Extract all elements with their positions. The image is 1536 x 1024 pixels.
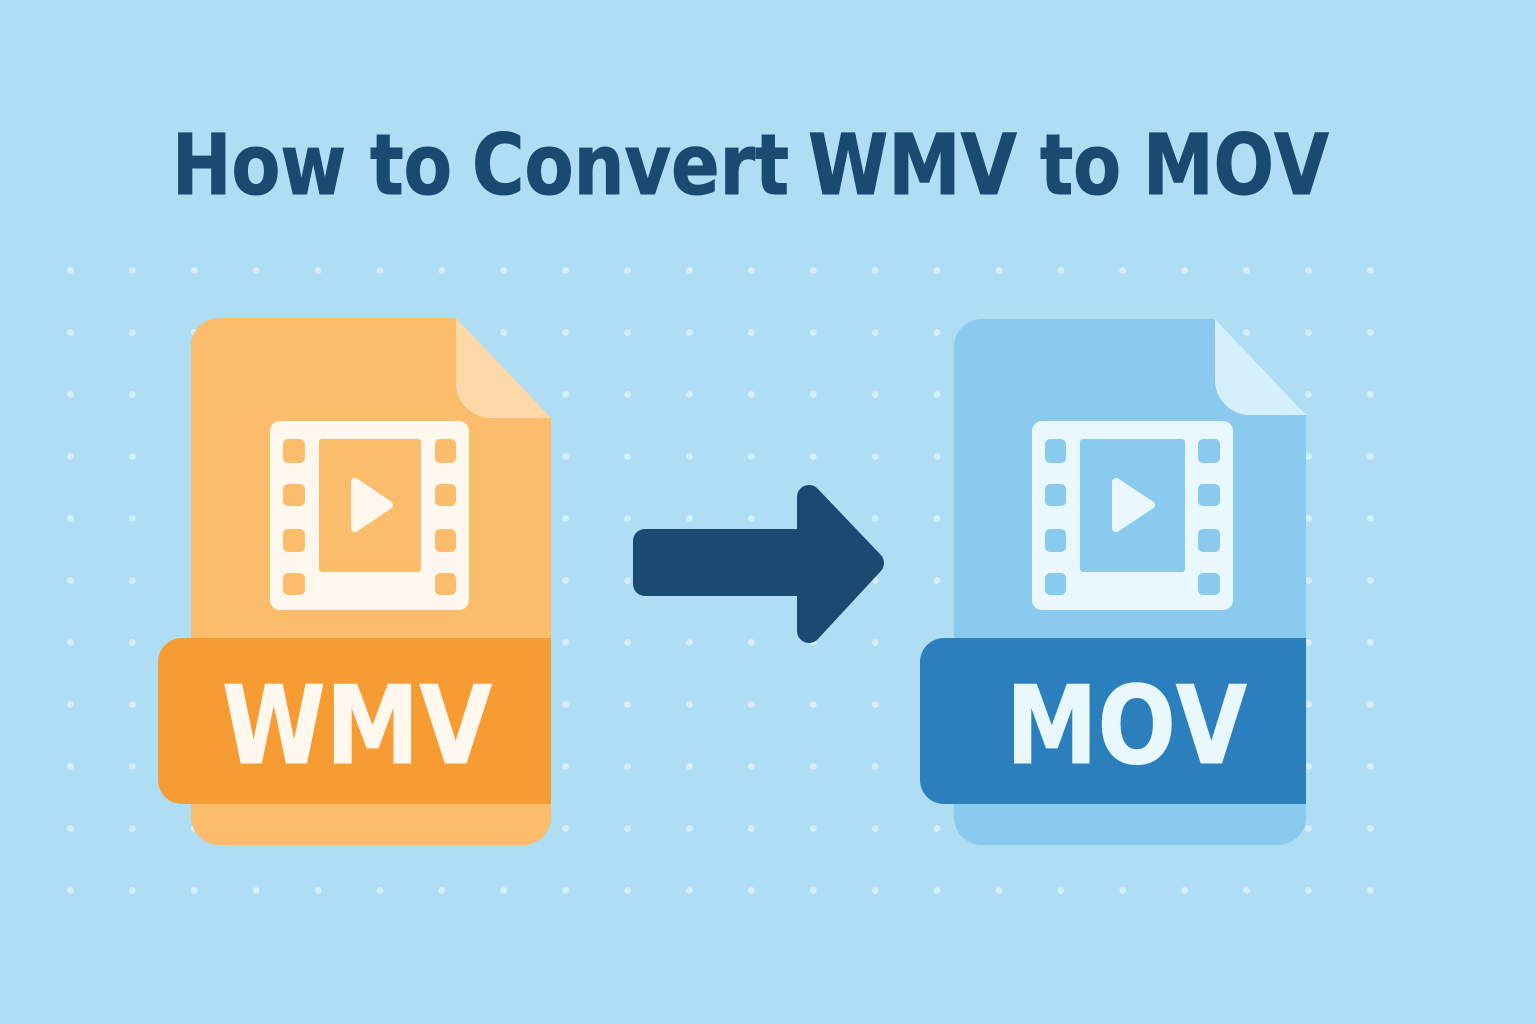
label band: WMV bbox=[158, 638, 551, 804]
title: Convert bbox=[472, 116, 789, 214]
label band: WMV: WMV bbox=[222, 664, 492, 789]
icon: MOV file bbox=[920, 319, 1306, 845]
icon: WMV file bbox=[158, 318, 551, 845]
title: MOV bbox=[1143, 116, 1329, 214]
arrow bbox=[633, 497, 872, 631]
title bbox=[172, 116, 1329, 214]
title: How bbox=[172, 116, 346, 214]
file body: MOV bbox=[954, 319, 1306, 845]
title: to bbox=[1040, 116, 1121, 214]
title: WMV bbox=[808, 116, 1017, 214]
file body: WMV bbox=[191, 318, 551, 845]
folded corner: MOV bbox=[1215, 319, 1306, 415]
folded corner: WMV bbox=[456, 318, 551, 418]
label band: MOV bbox=[920, 638, 1306, 804]
title: to bbox=[370, 116, 452, 214]
icon: film strip WMV bbox=[270, 421, 469, 610]
icon: film strip MOV bbox=[1032, 421, 1233, 610]
label band: MOV: MOV bbox=[1006, 664, 1247, 789]
